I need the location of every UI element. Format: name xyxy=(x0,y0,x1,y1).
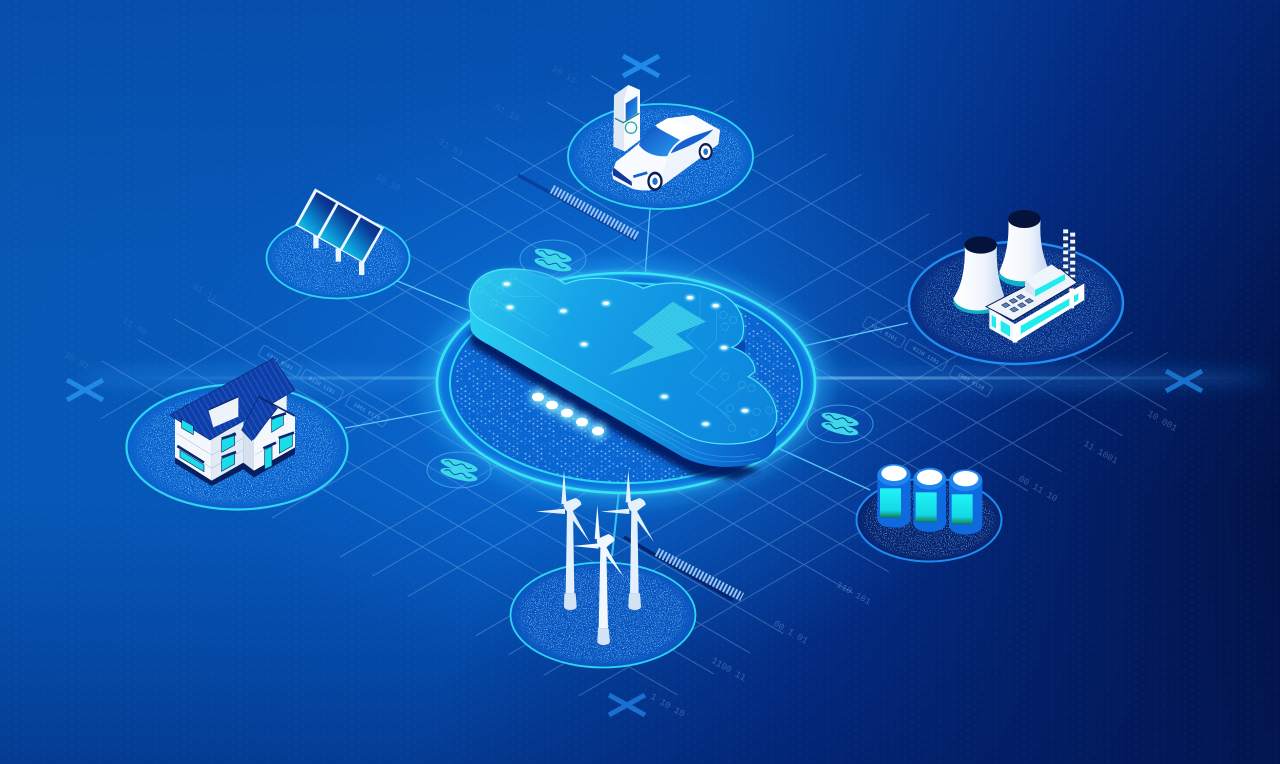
battery 3 xyxy=(949,469,982,534)
panel: house xyxy=(126,358,348,510)
circuit traces xyxy=(477,273,773,436)
data tags near house: 0110 1101 xyxy=(307,375,337,396)
central platform xyxy=(421,261,831,505)
cloud side wall xyxy=(469,303,777,467)
data bar bottom xyxy=(624,537,742,600)
binary data labels: 11 1001 xyxy=(1082,439,1119,467)
data bar top xyxy=(518,175,637,240)
icon: turbines xyxy=(536,470,654,645)
solar platform xyxy=(266,217,410,299)
cloud glow xyxy=(469,269,777,444)
data tags near power plant: 0110 1101 xyxy=(911,345,941,366)
binary data labels: 10 10 xyxy=(374,172,402,194)
data tags near house xyxy=(258,345,389,427)
binary data labels: 110 101 xyxy=(834,580,872,608)
data tags near power plant: 1001 0110 xyxy=(956,371,985,392)
horizontal light flare xyxy=(80,365,1270,391)
cloud shadow xyxy=(470,330,760,480)
binary data labels xyxy=(62,64,1179,720)
plant platform xyxy=(908,241,1124,365)
five glowing platform lights xyxy=(530,389,606,439)
icon: brain bottom xyxy=(427,452,491,488)
binary data labels: 01 10 xyxy=(492,102,521,124)
icon: brain top xyxy=(520,240,586,278)
binary data labels: 11 00 xyxy=(120,316,149,338)
panel: power plant xyxy=(908,210,1124,365)
binary data labels: 11 01 xyxy=(436,137,465,159)
icon: cooling towers and plant building xyxy=(953,210,1084,343)
turbine left xyxy=(536,470,590,610)
cloud lights xyxy=(502,281,750,427)
panel: electric car charging xyxy=(568,85,754,210)
cloud top face xyxy=(469,269,777,444)
battery 1 xyxy=(877,464,911,528)
connector lines xyxy=(345,209,908,556)
battery platform xyxy=(856,478,1002,562)
binary data labels: 1100 11 xyxy=(710,656,747,684)
icon: charging station xyxy=(613,85,640,152)
icon: brain right xyxy=(807,405,873,443)
cloud side layers xyxy=(603,400,760,462)
binary data labels: 1 10 10 xyxy=(648,692,686,720)
corner cross markers xyxy=(67,56,1202,715)
binary data labels: 00 1 01 xyxy=(772,619,809,647)
data tags near house: 1011 0101 xyxy=(265,351,295,372)
panel: batteries xyxy=(856,464,1002,562)
binary data labels: 10 001 xyxy=(1146,409,1179,434)
binary data labels: 10 01 xyxy=(62,350,91,372)
data tags near power plant: 1011 0101 xyxy=(869,322,899,343)
lightning bolt xyxy=(608,302,706,375)
panel: wind turbines xyxy=(510,470,696,668)
house platform xyxy=(126,384,348,510)
cloud with lightning bolt xyxy=(469,269,777,467)
icon: house xyxy=(169,358,295,486)
data tags near power plant xyxy=(862,316,993,397)
panel: solar panels xyxy=(266,188,410,299)
binary data labels: 00 11 10 xyxy=(1016,474,1059,504)
turbine right xyxy=(601,470,654,610)
battery 2 xyxy=(913,468,946,532)
cloud notch shading xyxy=(732,339,755,377)
turbine center xyxy=(572,505,623,645)
icon: solar array xyxy=(295,188,384,275)
icon: car xyxy=(612,115,720,191)
car platform xyxy=(568,104,754,210)
data tags near house: 1001 0110 xyxy=(352,401,381,422)
binary data labels: 10 11 xyxy=(550,64,578,86)
wind platform xyxy=(510,562,696,668)
icon: battery cells xyxy=(877,464,982,534)
binary data labels: 01 11 xyxy=(190,282,219,304)
